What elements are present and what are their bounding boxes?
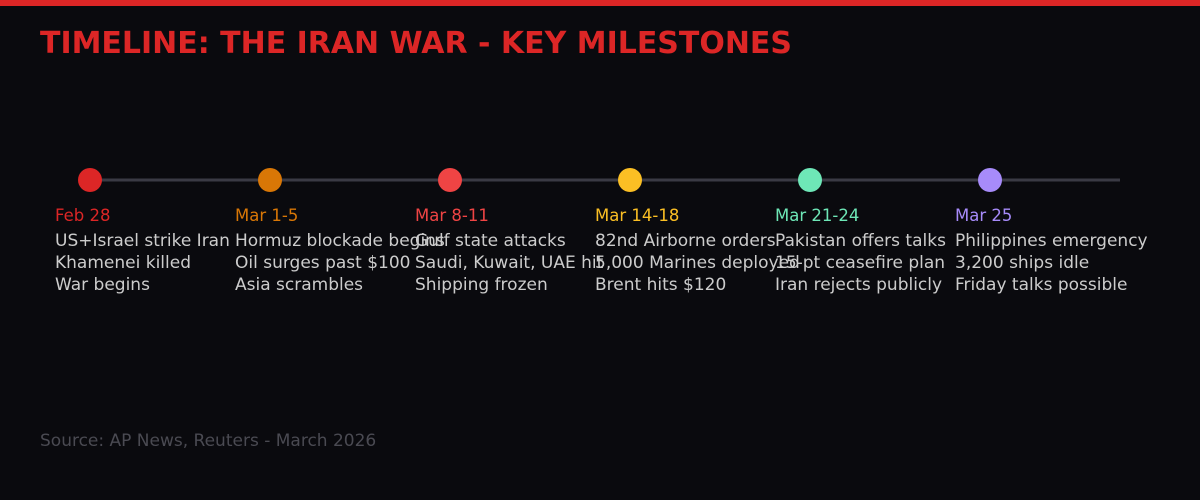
timeline axis	[90, 178, 1120, 182]
milestone: Mar 1-5: Mar 1-5	[235, 206, 298, 225]
milestone: Mar 8-11: Gulf state attacks	[415, 231, 566, 251]
milestone: Mar 25: Mar 25	[955, 206, 1012, 225]
milestone: Mar 1-5: Asia scrambles	[235, 275, 363, 295]
milestone: Mar 21-24: Mar 21-24	[775, 206, 859, 225]
milestone: Mar 14-18: 5,000 Marines deployed	[595, 253, 800, 273]
milestone: Mar 25: Philippines emergency	[955, 231, 1148, 251]
milestone: Mar 8-11: Saudi, Kuwait, UAE hit	[415, 253, 604, 273]
milestone: Mar 1-5: Hormuz blockade begins	[235, 231, 445, 251]
milestone: Mar 25: Friday talks possible	[955, 275, 1127, 295]
milestone: Mar 8-11: Shipping frozen	[415, 275, 548, 295]
milestone: Feb 28: Feb 28	[55, 206, 110, 225]
milestone: Mar 8-11: Mar 8-11	[415, 206, 489, 225]
source note: Source: AP News, Reuters - March 2026	[40, 431, 376, 451]
milestone: Mar 14-18	[595, 168, 800, 295]
milestone: Feb 28: Khamenei killed	[55, 253, 191, 273]
milestone: Mar 21-24	[775, 168, 946, 295]
milestone: Mar 21-24: Iran rejects publicly	[775, 275, 942, 295]
milestone: Mar 21-24: 15-pt ceasefire plan	[775, 253, 945, 273]
milestone: Mar 14-18: 82nd Airborne orders	[595, 231, 776, 251]
milestone: Mar 25: 3,200 ships idle	[955, 253, 1089, 273]
milestone: Mar 21-24: Pakistan offers talks	[775, 231, 946, 251]
milestone: Mar 1-5	[235, 168, 445, 295]
milestone: Mar 1-5: Oil surges past $100	[235, 253, 410, 273]
milestone: Mar 25	[955, 168, 1148, 295]
milestone: Feb 28	[55, 168, 230, 295]
title: TIMELINE: THE IRAN WAR - KEY MILESTONES	[40, 26, 792, 61]
milestone: Mar 8-11	[415, 168, 604, 295]
milestone: Feb 28: War begins	[55, 275, 150, 295]
milestone: Mar 14-18: Brent hits $120	[595, 275, 726, 295]
milestone: Feb 28: US+Israel strike Iran	[55, 231, 230, 251]
milestone: Mar 14-18: Mar 14-18	[595, 206, 679, 225]
